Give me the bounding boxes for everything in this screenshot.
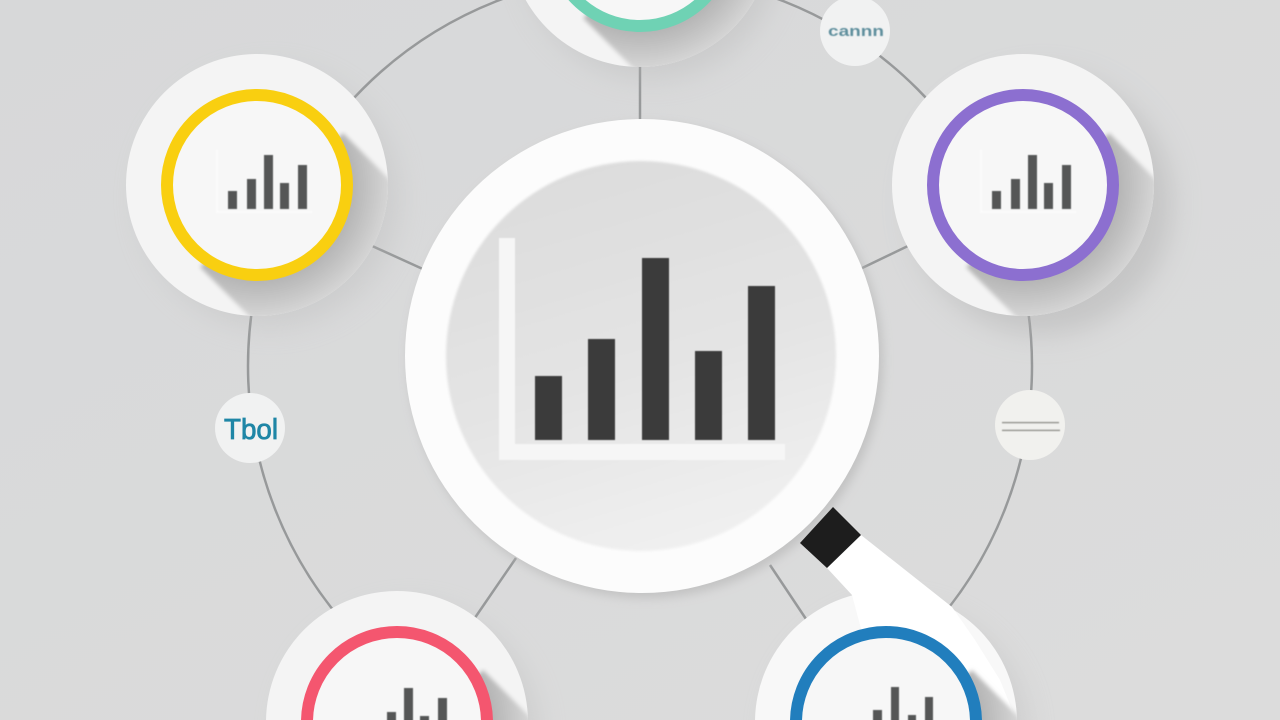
mini bar chart bbox=[368, 688, 447, 720]
badge: top right label: cannn bbox=[828, 23, 884, 40]
large bar chart bbox=[507, 238, 785, 452]
node: pink chart bbox=[266, 591, 532, 720]
mini bar chart bbox=[873, 687, 933, 720]
connector ring and spokes bbox=[248, 0, 1032, 720]
node: purple chart bbox=[892, 54, 1176, 338]
badge: text lines bbox=[995, 390, 1065, 460]
mini bar chart bbox=[981, 150, 1076, 212]
badge: Tool label bbox=[215, 393, 285, 463]
node: top teal bbox=[526, 0, 766, 75]
lens bbox=[446, 161, 836, 551]
badge: Tool label: Tbol bbox=[224, 414, 278, 446]
handle collar bbox=[800, 507, 861, 568]
node: yellow chart bbox=[126, 54, 392, 320]
magnifier handle bbox=[800, 507, 1017, 720]
magnifying glass bbox=[405, 119, 883, 598]
badge: top right label bbox=[820, 0, 890, 66]
mini bar chart bbox=[217, 150, 312, 212]
node: blue chart with magnifier handle bbox=[755, 507, 1022, 720]
